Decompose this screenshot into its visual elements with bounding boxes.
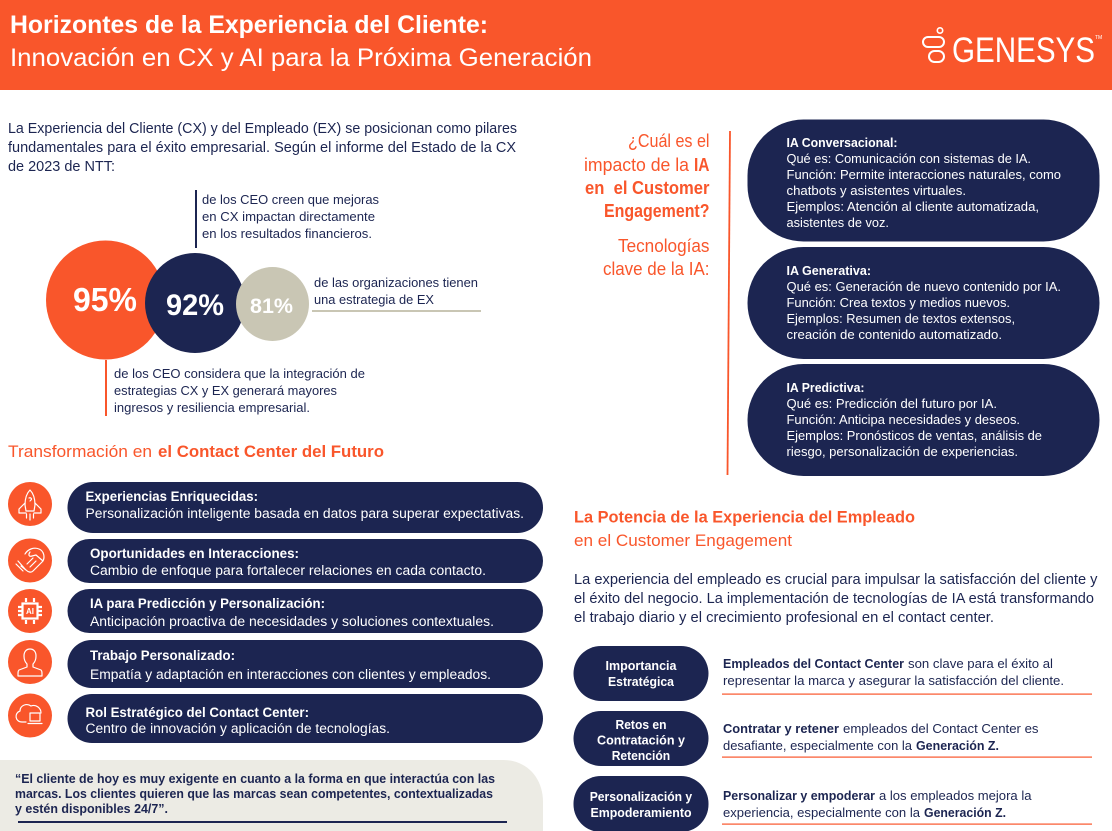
pill: Experiencias Enriquecidas: Personalización inteligente basada en datos para superar expectativas.: [86, 506, 524, 521]
heading: key technologies: [603, 236, 710, 279]
vertical divider: [728, 131, 730, 475]
pill: IA Predictiva: IA Predictiva:: [786, 381, 864, 395]
pill: Rol Estratégico: Rol Estratégico del Contact Center:: [86, 705, 309, 720]
pill: IA Conversacional: Qué es: Comunicación con sistemas de IA.: [786, 152, 1031, 166]
pill: Retos en Contratación: Retención: [612, 749, 670, 763]
pill: Experiencias Enriquecidas: [68, 482, 543, 533]
pill: IA para Predicción: IA para Predicción y Personalización:: [90, 596, 325, 611]
heading: AI impact question: en el Customer: [585, 178, 710, 198]
callout: 95% CEO: de los CEO considera que la integración de: [114, 367, 365, 381]
pill: Personalización y Empoderamiento: Empoderamiento: [590, 806, 692, 820]
circle: 92%: 92%: [166, 289, 224, 322]
pill: IA para Predicción: [68, 589, 543, 633]
circle: 81%: [236, 267, 309, 341]
row text: Retos: empleados del Contact Center es: [843, 722, 1038, 736]
logo: Genesys: TM: [1095, 35, 1102, 41]
row text: Retos: Generación Z.: [916, 739, 999, 753]
intro text: de 2023 de NTT:: [8, 159, 115, 175]
pill: Retos en Contratación: Contratación y: [597, 734, 685, 748]
circle: 81%: 81%: [250, 295, 293, 318]
circle: 95%: 95%: [73, 281, 137, 318]
row text: Personalizar: experiencia, especialmente con la: [723, 806, 920, 820]
row text: Personalizar: a los empleados mejora la: [879, 789, 1032, 803]
heading: AI impact question: Engagement?: [604, 201, 710, 221]
callout: 92% CEO: de los CEO creen que mejoras: [202, 193, 379, 207]
row text: Importancia: [722, 657, 1092, 695]
callout: 92% CEO: en CX impactan directamente: [202, 210, 375, 224]
intro text: La Experiencia del Cliente (CX) y del Empleado (EX) se posicionan como pilares: [8, 121, 517, 137]
heading: AI impact question: ¿Cuál es el: [628, 131, 710, 151]
quote text: [15, 772, 495, 816]
title: Innovación en CX y AI para la Próxima Generación: [10, 44, 592, 72]
pill: IA Conversacional: chatbots y asistentes virtuales.: [786, 184, 966, 198]
employee experience paragraph: [574, 572, 1098, 626]
quote text: y estén disponibles 24/7”.: [15, 802, 168, 816]
callout: 81% organizations: una estrategia de EX: [314, 293, 435, 307]
heading: key technologies: clave de la IA:: [603, 259, 710, 279]
pill: IA Conversacional: Función: Permite interacciones naturales, como: [786, 168, 1061, 182]
heading: employee experience: en el Customer Engagement: [574, 532, 792, 550]
circle: 92%: [145, 253, 245, 353]
pill: IA Conversacional: IA Conversacional:: [786, 136, 898, 150]
header band: [0, 0, 1112, 90]
heading: employee experience: La Potencia de la Experiencia del Empleado: [574, 508, 915, 526]
row text: Retos: desafiante, especialmente con la: [723, 739, 912, 753]
icon: person: [8, 640, 52, 684]
pill: IA Predictiva: [748, 364, 1100, 476]
pill: IA Generativa: Función: Crea textos y medios nuevos.: [786, 296, 1010, 310]
employee experience paragraph: La experiencia del empleado es crucial para impulsar la satisfacción del cliente y: [574, 572, 1098, 588]
pill: Importancia Estratégica: [574, 646, 708, 701]
row text: Retos: [722, 722, 1092, 758]
quote text: “El cliente de hoy es muy exigente en cuanto a la forma en que interactúa con las: [15, 772, 495, 786]
icon: AI chip: [8, 589, 52, 633]
pill: Experiencias Enriquecidas: Experiencias Enriquecidas:: [86, 489, 258, 504]
row text: Importancia: representar la marca y asegurar la satisfacción del cliente.: [723, 674, 1064, 688]
pill: Rol Estratégico: [68, 694, 543, 743]
intro text: fundamentales para el éxito empresarial. Según el informe del Estado de la CX: [8, 140, 516, 156]
pill: Personalización y Empoderamiento: Personalización y: [590, 790, 692, 804]
heading: key technologies: Tecnologías: [618, 236, 710, 256]
pill: Personalización y Empoderamiento: [574, 776, 708, 831]
pill: Retos en Contratación: Retos en: [616, 718, 666, 732]
pill: Oportunidades en Interacciones: Oportunidades en Interacciones:: [90, 546, 299, 561]
pill: Trabajo Personalizado: [68, 640, 543, 688]
circle: 95%: [46, 240, 165, 360]
icon: rocket: [8, 482, 52, 526]
pill: IA Conversacional: asistentes de voz.: [786, 216, 889, 230]
row text: Importancia: Empleados del Contact Center: [723, 657, 904, 671]
callout: 95% CEO: [105, 360, 365, 416]
row text: Personalizar: Generación Z.: [924, 806, 1006, 820]
title: Horizontes de la Experiencia del Cliente:: [10, 11, 488, 39]
pill: IA para Predicción: Anticipación proactiva de necesidades y soluciones contextuales.: [90, 614, 494, 629]
icon: handshake: [8, 538, 52, 582]
quote text: marcas. Los clientes quieren que las marcas sean competentes, contextualizadas: [15, 787, 493, 801]
pill: IA Predictiva: riesgo, personalización de experiencias.: [786, 445, 1018, 459]
pill: IA Predictiva: Función: Anticipa necesidades y deseos.: [786, 413, 1020, 427]
heading: Contact Center: Transformación en: [8, 442, 152, 461]
pill: IA Predictiva: Ejemplos: Pronósticos de ventas, análisis de: [786, 429, 1042, 443]
pill: IA Generativa: IA Generativa:: [786, 264, 871, 278]
callout: 81% organizations: de las organizaciones tienen: [314, 276, 478, 290]
heading: AI impact question: impacto de la: [584, 155, 690, 175]
callout: 95% CEO: estrategias CX y EX generará mayores: [114, 384, 337, 398]
heading: Contact Center: [8, 442, 384, 461]
callout: 95% CEO: ingresos y resiliencia empresarial.: [114, 401, 310, 415]
employee experience paragraph: el éxito del negocio. La implementación de tecnologías de IA está transformando: [574, 591, 1094, 607]
heading: AI impact question: IA: [694, 155, 710, 175]
pill: IA Generativa: Ejemplos: Resumen de textos extensos,: [786, 312, 1015, 326]
pill: Trabajo Personalizado: Trabajo Personalizado:: [90, 648, 235, 663]
pill: IA Predictiva: Qué es: Predicción del futuro por IA.: [786, 397, 997, 411]
callout: 92% CEO: en los resultados financieros.: [202, 227, 372, 241]
pill: Importancia Estratégica: Importancia: [606, 659, 678, 673]
pill: IA Conversacional: [748, 120, 1100, 242]
heading: Contact Center: el Contact Center del Futuro: [158, 442, 384, 461]
row text: Personalizar: [722, 789, 1092, 825]
callout: 81% organizations: [312, 276, 481, 312]
intro text: [8, 121, 517, 175]
pill: Oportunidades en Interacciones: [68, 539, 543, 583]
row text: Importancia: son clave para el éxito al: [908, 657, 1053, 671]
panel: quote: [0, 760, 543, 831]
callout: 92% CEO: [195, 190, 379, 248]
pill: Retos en Contratación: [574, 711, 708, 766]
pill: Oportunidades en Interacciones: Cambio de enfoque para fortalecer relaciones en cada contacto.: [90, 563, 486, 578]
heading: employee experience: [574, 508, 915, 550]
pill: Importancia Estratégica: Estratégica: [608, 675, 675, 689]
heading: AI impact question: [584, 131, 710, 221]
title: [10, 11, 592, 72]
pill: IA Generativa: Qué es: Generación de nuevo contenido por IA.: [786, 280, 1061, 294]
row text: Personalizar: Personalizar y empoderar: [723, 789, 875, 803]
pill: IA Generativa: [748, 247, 1100, 359]
icon: AI chip: AI: [26, 607, 34, 616]
icon: cloud and laptop: [8, 694, 52, 738]
row text: Retos: Contratar y retener: [723, 722, 839, 736]
pill: IA Generativa: creación de contenido automatizado.: [786, 328, 1002, 342]
pill: IA Conversacional: Ejemplos: Atención al cliente automatizada,: [786, 200, 1039, 214]
employee experience paragraph: el trabajo diario y el crecimiento profesional en el contact center.: [574, 610, 994, 626]
pill: Rol Estratégico: Centro de innovación y aplicación de tecnologías.: [86, 721, 390, 736]
pill: Trabajo Personalizado: Empatía y adaptación en interacciones con clientes y empleados.: [90, 667, 491, 682]
